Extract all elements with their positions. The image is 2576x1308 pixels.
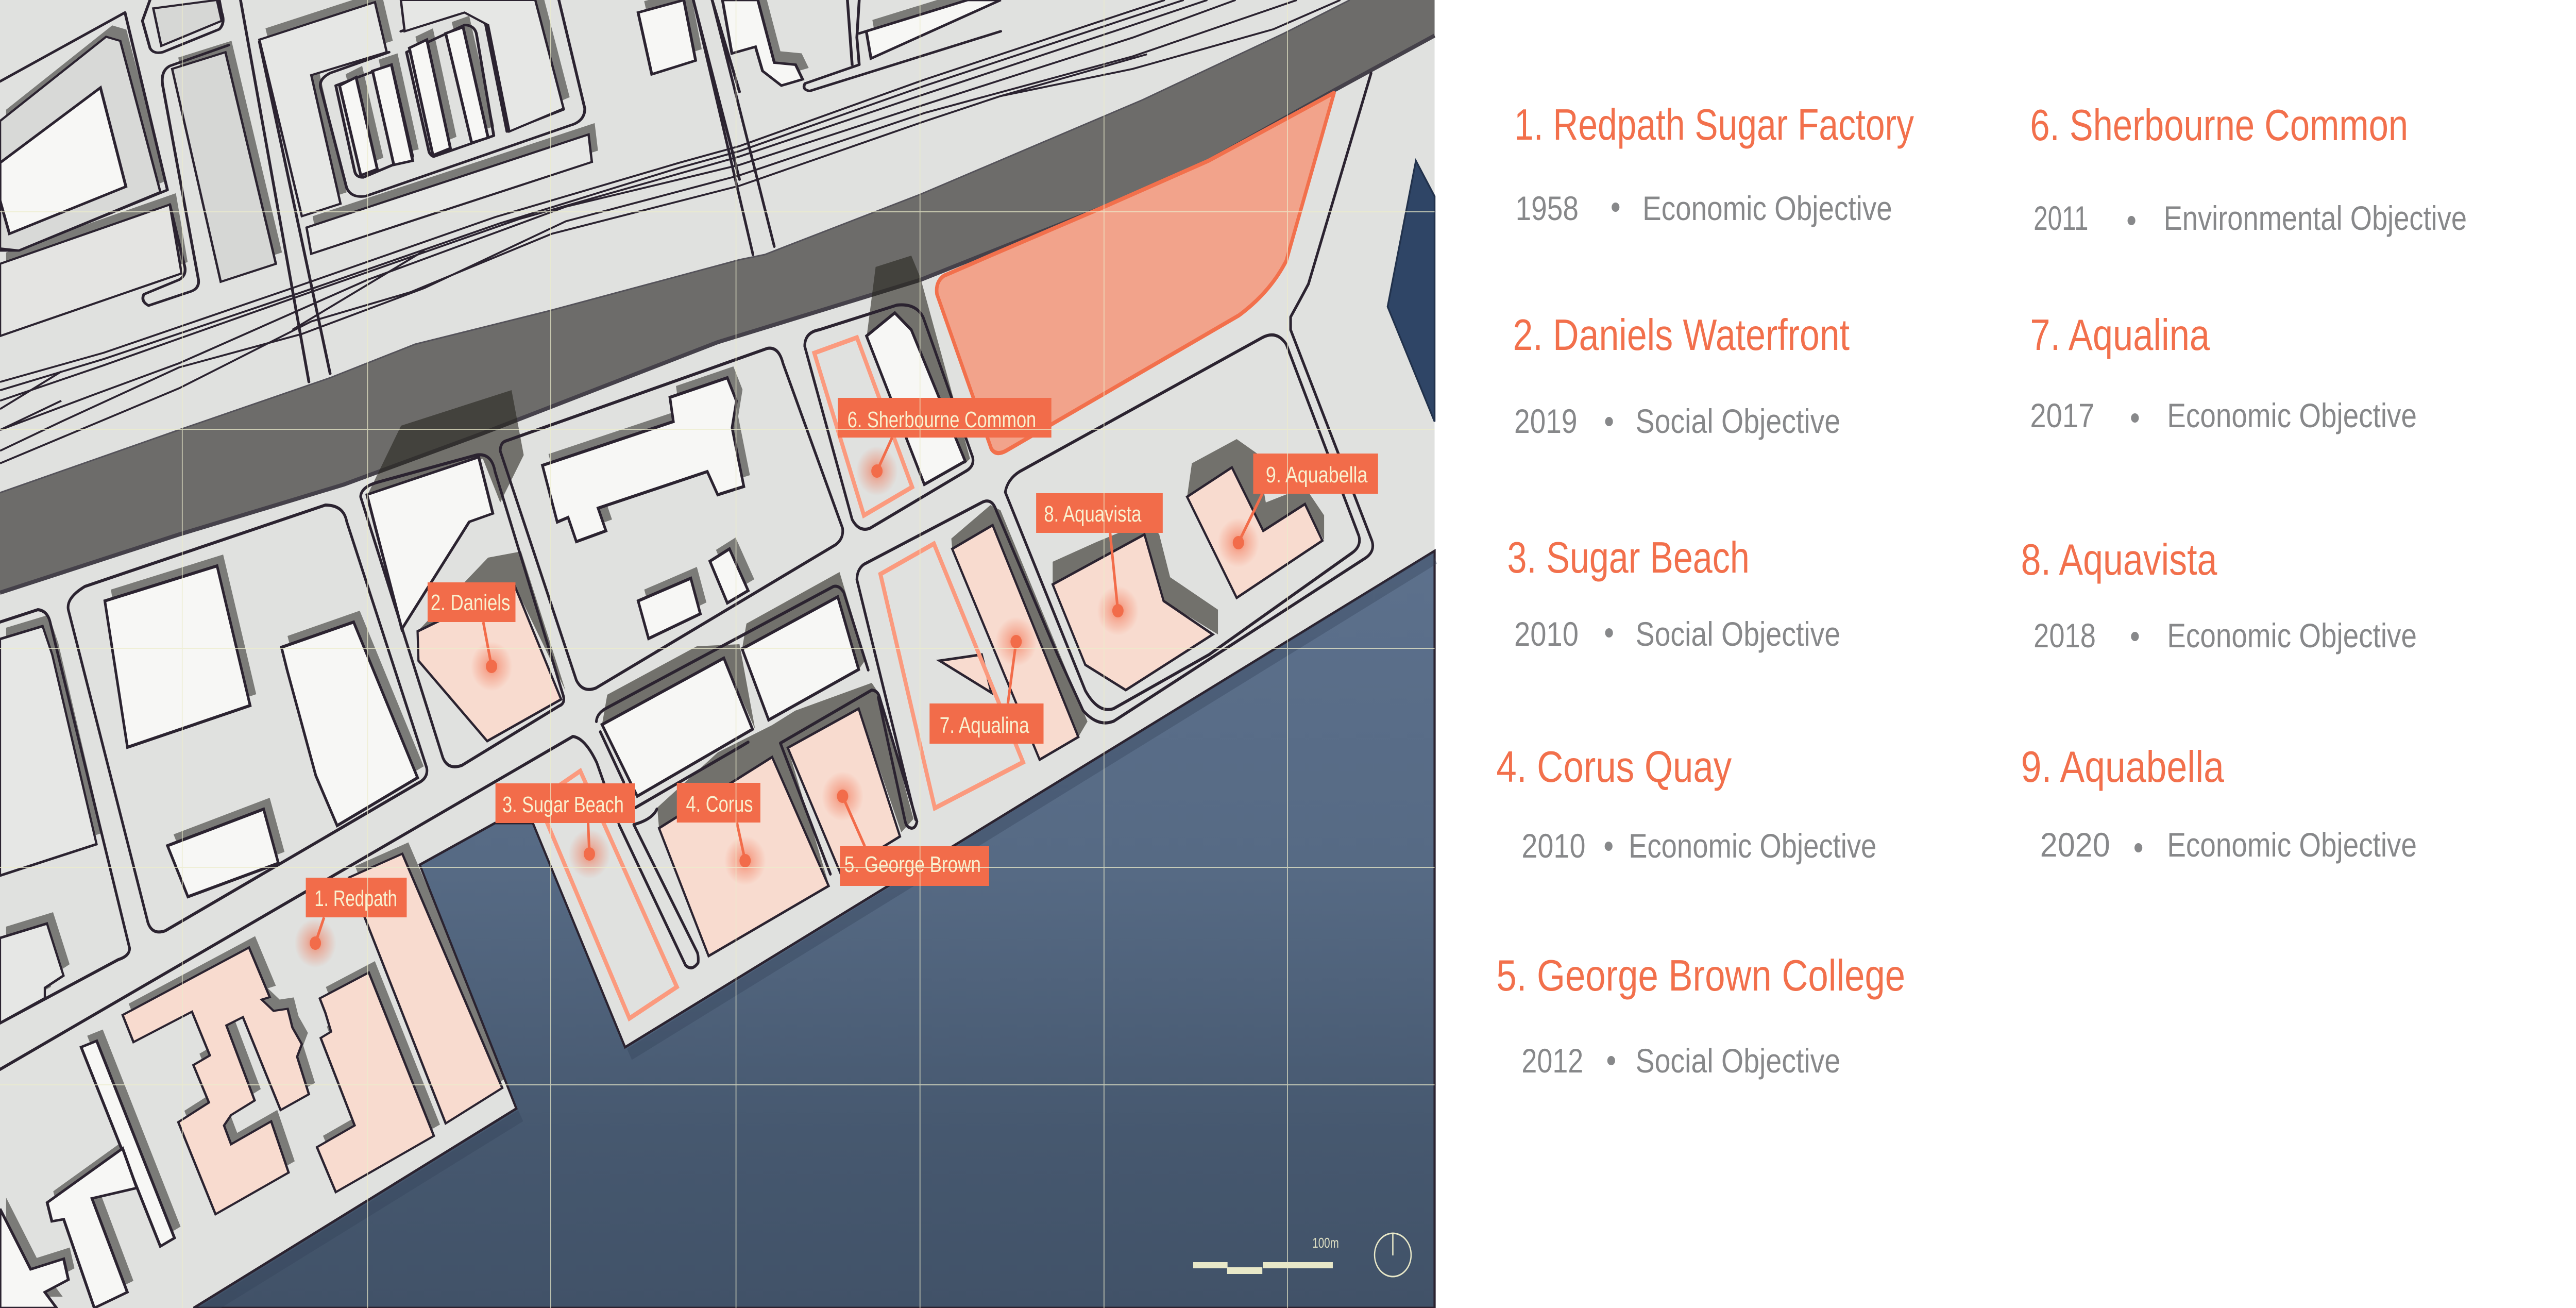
entry 1: Redpath Sugar Factory: 1. Redpath Sugar Factory (1514, 100, 1914, 149)
map marker 6: Sherbourne Common (838, 398, 1052, 496)
pale building blocks (0, 0, 592, 1023)
water inlet: upper right (1387, 161, 1435, 422)
entry 5: George Brown College: 2012 (1521, 1042, 1583, 1080)
site outlines (538, 338, 1023, 1018)
entry 9: Aquabella: Economic Objective (2167, 826, 2417, 864)
pink site buildings (123, 467, 1323, 1214)
map marker 2: Daniels: 2. Daniels (431, 590, 510, 615)
map marker 5: George Brown: 5. George Brown (844, 851, 981, 877)
entry 5: George Brown College: Social Objective (1636, 1042, 1840, 1080)
entry 3: Sugar Beach (1507, 533, 1840, 653)
entry 1: Redpath Sugar Factory (1514, 100, 1914, 227)
panel: site map (0, 0, 1435, 1308)
map marker 1: Redpath: 1. Redpath (314, 885, 397, 911)
white buildings (0, 0, 1001, 1308)
entry 5: George Brown College: 5. George Brown College (1496, 951, 1905, 1000)
entry 5: George Brown College (1496, 951, 1905, 1080)
map marker 3: Sugar Beach: 3. Sugar Beach (502, 792, 624, 817)
map marker 4: Corus (677, 783, 766, 885)
entry 7: Aqualina (2030, 310, 2417, 434)
tall building shadows (367, 256, 1324, 884)
entry 9: Aquabella: 2020 (2040, 826, 2110, 864)
entry 1: Redpath Sugar Factory: 1958 (1516, 190, 1579, 227)
map marker 8: Aquavista: 8. Aquavista (1044, 501, 1142, 527)
entry 6: Sherbourne Common: 6. Sherbourne Common (2030, 100, 2408, 149)
entry 6: Sherbourne Common: Environmental Objective (2164, 199, 2467, 237)
entry 6: Sherbourne Common: 2011 (2033, 199, 2089, 237)
map marker 3: Sugar Beach (496, 783, 635, 879)
map marker 6: Sherbourne Common: 6. Sherbourne Common (848, 407, 1036, 432)
panel: project list (1496, 100, 2467, 1080)
entry 4: Corus Quay (1496, 742, 1876, 865)
land base (0, 0, 1435, 1308)
map marker 5: George Brown (822, 772, 989, 886)
scale bar: 100m (1312, 1235, 1339, 1251)
entry 3: Sugar Beach: 2010 (1514, 615, 1579, 653)
map marker 7: Aqualina (929, 617, 1043, 744)
north arrow (1375, 1233, 1411, 1277)
entry 4: Corus Quay: 4. Corus Quay (1496, 742, 1732, 791)
entry 7: Aqualina: Economic Objective (2167, 397, 2417, 434)
entry 3: Sugar Beach: 3. Sugar Beach (1507, 533, 1750, 582)
grey building blocks (0, 0, 276, 336)
water (194, 551, 1435, 1308)
low building shadows (6, 0, 1007, 1297)
map marker 9: Aquabella (1217, 454, 1378, 567)
entry 2: Daniels Waterfront: Social Objective (1636, 403, 1840, 440)
entry 8: Aquavista: 2018 (2033, 617, 2096, 655)
Sherbourne Common park (937, 93, 1334, 453)
map marker 1: Redpath (295, 878, 406, 968)
map marker 2: Daniels (428, 582, 516, 691)
entry 9: Aquabella (2021, 742, 2417, 864)
shoreline soft shadow (198, 558, 1435, 1308)
map marker 8: Aquavista (1036, 493, 1163, 635)
entry 9: Aquabella: 9. Aquabella (2021, 742, 2224, 791)
map marker 7: Aqualina: 7. Aqualina (940, 712, 1029, 738)
rail tracks (0, 0, 1341, 463)
map marker 9: Aquabella: 9. Aquabella (1266, 462, 1368, 488)
entry 4: Corus Quay: Economic Objective (1629, 827, 1876, 865)
entry 2: Daniels Waterfront: 2. Daniels Waterfront (1513, 310, 1850, 359)
entry 3: Sugar Beach: Social Objective (1636, 615, 1840, 653)
entry 8: Aquavista (2021, 535, 2417, 655)
entry 6: Sherbourne Common (2030, 100, 2467, 237)
scale bar (1193, 1235, 1339, 1274)
entry 2: Daniels Waterfront (1513, 310, 1850, 440)
entry 7: Aqualina: 2017 (2030, 397, 2094, 434)
entry 4: Corus Quay: 2010 (1521, 827, 1586, 865)
entry 2: Daniels Waterfront: 2019 (1514, 403, 1577, 440)
entry 7: Aqualina: 7. Aqualina (2030, 310, 2210, 359)
entry 8: Aquavista: 8. Aquavista (2021, 535, 2217, 584)
map marker 4: Corus: 4. Corus (686, 791, 753, 817)
road lines (0, 0, 1373, 1069)
expressway band (0, 0, 1435, 593)
entry 1: Redpath Sugar Factory: Economic Objective (1642, 190, 1892, 227)
entry 8: Aquavista: Economic Objective (2167, 617, 2417, 655)
